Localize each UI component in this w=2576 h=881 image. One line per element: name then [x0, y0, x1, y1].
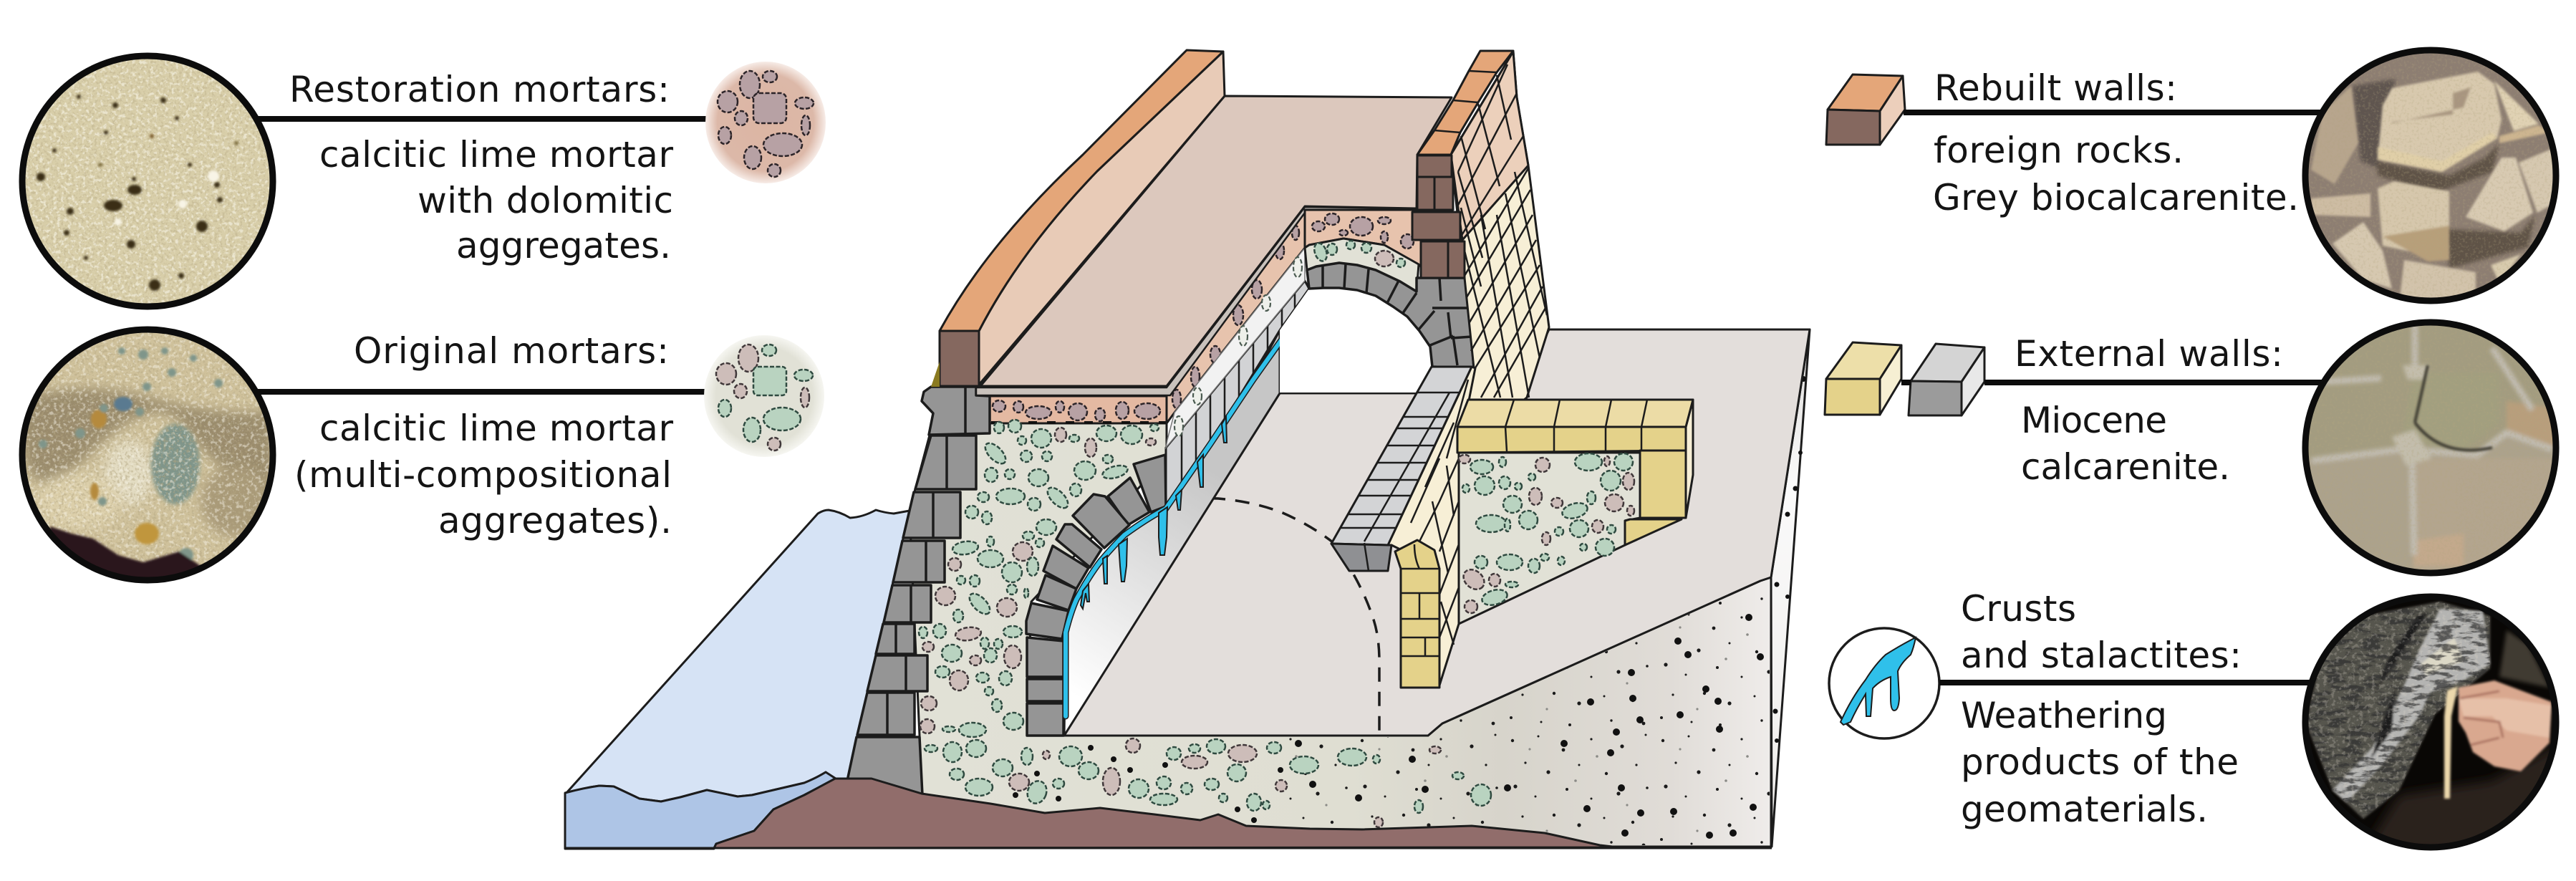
upper left wall: brown end [940, 331, 979, 386]
arch voussoirs: lower arch [1026, 455, 1166, 736]
dashed arch projection on the floor [1187, 499, 1379, 736]
right side face of the block [1771, 329, 1810, 847]
upper arch voussoirs [1307, 263, 1474, 368]
bedrock large grains [1013, 614, 1764, 839]
upper left wall: inner face [979, 52, 1225, 385]
text: crusts and stalactites description: Weathering [1961, 695, 2167, 736]
inner wall: grey stone top [1331, 367, 1472, 545]
photo: rebuilt wall stones [2302, 49, 2559, 304]
arch spandrel: original mortar [1305, 239, 1419, 292]
text: restoration mortars description: aggregates. [456, 225, 671, 266]
yellow pillar [1395, 540, 1439, 688]
bedrock: brown base [714, 779, 1619, 848]
text: restoration mortars description: with dolomitic [418, 180, 673, 221]
photo: external wall masonry [2302, 321, 2559, 576]
right wall: orange coping blocks [1417, 51, 1513, 155]
heading: crusts and stalactites: Crusts [1961, 588, 2076, 630]
text: rebuilt walls description: foreign rocks. [1934, 130, 2184, 171]
text: external walls description: calcarenite. [2021, 446, 2230, 488]
platform surface [1063, 329, 1810, 736]
side face grains [1773, 376, 1806, 743]
leader line: external walls [1901, 380, 2324, 385]
white weathered band [1166, 248, 1305, 448]
heading: original mortars: Original mortars: [354, 330, 669, 372]
arch spandrel: peach mortar [1305, 210, 1421, 266]
text: original mortars description [294, 408, 673, 541]
hole below the upper arch [1280, 288, 1432, 393]
rear stones above the vault [1166, 281, 1309, 509]
inner wall: cream joints face [1388, 367, 1475, 688]
text: external walls description [2021, 400, 2230, 488]
leader line: restoration mortars [258, 116, 706, 122]
text: crusts and stalactites description: products of the [1961, 741, 2239, 783]
floor edge band [976, 207, 1417, 395]
heading: restoration mortars: Restoration mortars: [289, 69, 670, 110]
right wall: cream and peach face with masonry joints [1451, 52, 1549, 453]
icon: restoration mortar swatch [705, 62, 826, 183]
photo: stalactite held by hand [2302, 594, 2559, 852]
upper floor surface [980, 96, 1452, 386]
text: rebuilt walls description: Grey biocalcarenite. [1933, 177, 2299, 218]
leader line: rebuilt walls [1904, 110, 2320, 115]
speckled bedrock texture [1282, 579, 1770, 845]
vault intrados [1064, 330, 1280, 736]
heading: crusts and stalactites [1961, 588, 2242, 676]
leader line: crusts and stalactites [1939, 680, 2313, 685]
water body: deep blue [565, 772, 836, 849]
text: original mortars description: (multi-compositional [294, 454, 672, 496]
icon: crusts and stalactites [1829, 628, 1939, 738]
leader line: original mortars [258, 389, 705, 395]
main diagram: cross-section of the structure [565, 50, 1810, 849]
text: restoration mortars description [319, 134, 673, 266]
rear yellow wall: coping and right pier [1457, 400, 1693, 545]
upper left wall: orange coping [940, 50, 1223, 331]
photo: restoration mortar sample [21, 54, 274, 309]
heading: crusts and stalactites: and stalactites: [1961, 635, 2242, 676]
front wall quoins: grey masonry [847, 387, 990, 795]
photo: original mortar sample [21, 328, 274, 587]
blue crusts and stalactites on the vault [1066, 330, 1288, 716]
text: original mortars description: aggregates). [438, 500, 672, 541]
icon: original mortar swatch [704, 335, 824, 457]
rear yellow wall: mortar panel with aggregates [1459, 453, 1640, 624]
front face: mortar and rubble fill [910, 423, 1771, 847]
icon: external wall blocks [1825, 342, 1984, 415]
water body: light blue [566, 510, 910, 801]
heading: external walls: External walls: [2015, 333, 2283, 375]
base line [565, 847, 1772, 849]
inner wall: grey stone front [1331, 543, 1391, 571]
front face: original mortar aggregates [919, 420, 1491, 827]
text: crusts and stalactites description [1961, 695, 2239, 830]
small olive wedge [931, 362, 940, 387]
heading: rebuilt walls: Rebuilt walls: [1934, 67, 2177, 109]
text: restoration mortars description: calcitic lime mortar [319, 134, 673, 175]
front face: restoration mortar band with aggregates [990, 396, 1167, 423]
slanted peach mortar strip [1167, 210, 1305, 423]
text: original mortars description: calcitic lime mortar [319, 408, 673, 449]
text: rebuilt walls description [1933, 130, 2299, 218]
right wall: brown end blocks [1412, 155, 1465, 278]
text: crusts and stalactites description: geomaterials. [1961, 789, 2208, 830]
icon: rebuilt wall block [1826, 74, 1905, 145]
text: external walls description: Miocene [2021, 400, 2167, 441]
